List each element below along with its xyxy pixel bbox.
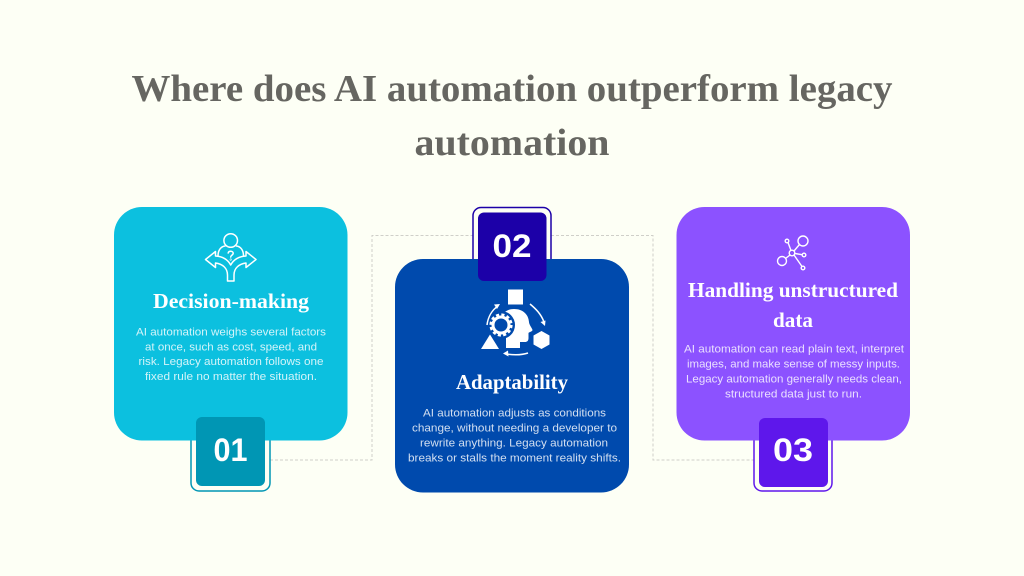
badge outline 03: [754, 400, 832, 491]
badge 02: 02: [492, 228, 532, 264]
badge 03: 03: [773, 432, 813, 468]
text: adaptability description: rewrite anything. Legacy automation: [420, 438, 608, 450]
title: [132, 68, 892, 164]
card 2 background: [395, 259, 629, 492]
card 3 background: [676, 207, 910, 440]
badge 02: [478, 212, 546, 281]
text: decision-making description: fixed rule no matter the situation.: [145, 371, 317, 383]
badge 01: 01: [214, 432, 248, 468]
dashed connector between cards: [270, 236, 754, 460]
panel: adaptability: [395, 208, 629, 492]
text: decision-making description: at once, such as cost, speed, and: [145, 342, 317, 354]
heading: decision-making: Decision-making: [153, 289, 310, 313]
text: decision-making description: risk. Legacy automation follows one: [138, 356, 324, 368]
icon: person at crossroads: [206, 234, 256, 281]
text: handling unstructured data description: images, and make sense of messy inputs.: [687, 358, 900, 370]
text: adaptability description: breaks or stalls the moment reality shifts.: [408, 452, 621, 464]
text: handling unstructured data description: structured data just to run.: [725, 388, 862, 400]
badge 03: [759, 418, 828, 487]
title: Where does AI automation outperform legacy: [132, 68, 892, 110]
title: automation: [414, 122, 610, 164]
text: decision-making description: [136, 326, 326, 383]
text: handling unstructured data description: [684, 344, 905, 400]
icon: head with gear and shapes: [481, 290, 550, 356]
text: handling unstructured data description: Legacy automation generally needs clean,: [686, 374, 902, 386]
text: handling unstructured data description: AI automation can read plain text, interpret: [684, 344, 905, 356]
heading: handling unstructured data: data: [773, 308, 813, 332]
heading: handling unstructured data: [688, 278, 898, 332]
text: adaptability description: [408, 408, 621, 464]
badge outline 01: [191, 400, 270, 491]
panel: handling unstructured data: [676, 207, 910, 491]
panel: decision-making: [114, 207, 348, 491]
badge outline 02: [473, 208, 551, 298]
icon: network nodes: [778, 236, 808, 270]
heading: handling unstructured data: Handling unstructured: [688, 278, 898, 302]
text: decision-making description: AI automation weighs several factors: [136, 326, 326, 338]
text: adaptability description: change, without needing a developer to: [412, 422, 617, 434]
text: adaptability description: AI automation adjusts as conditions: [423, 408, 606, 420]
badge 01: [196, 417, 265, 486]
heading: adaptability: Adaptability: [456, 370, 568, 394]
card 1 background: [114, 207, 348, 440]
